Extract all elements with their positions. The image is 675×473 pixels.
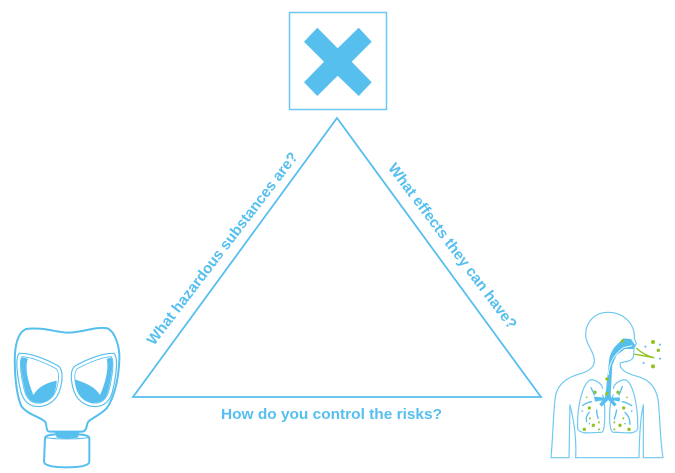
label: right side: What effects they can have? [384,160,520,333]
inhaled stream [635,348,654,358]
icon: gas mask [15,328,119,467]
icon: human respiratory system [551,312,663,458]
lung arrows [583,387,632,424]
label: bottom side: How do you control the risks? [221,406,442,423]
body outline [551,312,663,458]
icon: X in a square box [290,12,386,110]
blue particles [581,344,661,424]
green particles [583,339,660,431]
label: left side: What hazardous substances are? [144,149,302,348]
triangle [133,118,541,397]
airway highlights [608,346,632,375]
airway [594,338,635,407]
